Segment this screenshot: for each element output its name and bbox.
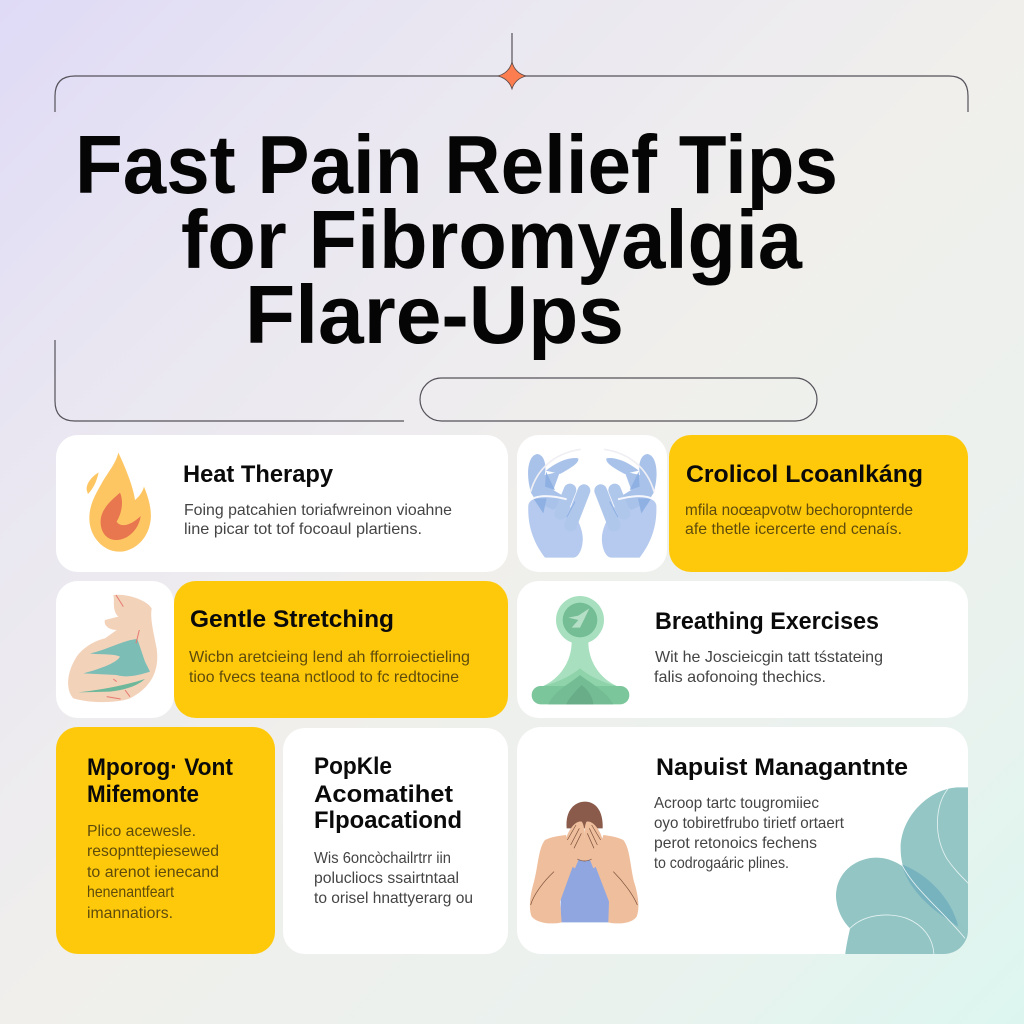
icon: flame: [87, 453, 151, 552]
body text: polucliocs ssairtntaal: [314, 870, 459, 887]
body text: to orisel hnattyerarg ou: [314, 890, 473, 907]
heading: Breathing Exercises: [655, 608, 879, 635]
panel: heat therapy: [56, 435, 508, 572]
title: Flare-Ups: [245, 268, 624, 361]
body text: line picar tot tof focoaul plartiens.: [184, 521, 422, 538]
body text: Wis 6oncòchailrtrr iin: [314, 850, 451, 867]
body text: [184, 502, 452, 538]
body text: [314, 850, 473, 907]
body text: Plico acewesle.: [87, 823, 196, 840]
body text: [87, 823, 219, 922]
title frame: [55, 33, 968, 421]
panel: breathing exercises: [517, 581, 968, 718]
body text: falis aofonoing thechics.: [654, 669, 826, 686]
body text: Acroop tartc tougromiiec: [654, 795, 819, 812]
body text: to arenot ienecand: [87, 864, 219, 881]
panel: crolicol icon tile: [517, 435, 667, 572]
icon: person covering face: [530, 802, 638, 923]
body text: [654, 795, 845, 872]
body text: Foing patcahien toriafwreinon vioahne: [184, 502, 452, 519]
heading: Gentle Stretching: [190, 606, 394, 633]
body text: afe thetle icercerte end cenaís.: [685, 521, 902, 538]
heading: Acomatihet: [314, 781, 453, 808]
body text: resopnttepiesewed: [87, 843, 219, 860]
body text: [654, 649, 883, 686]
body text: [189, 649, 470, 686]
panel: popkle: [283, 728, 508, 954]
heading: Mifemonte: [87, 781, 199, 808]
body text: perot retonoics fechens: [654, 835, 817, 852]
icon: breathing figure: [532, 596, 629, 704]
heading: PopKle: [314, 753, 392, 780]
title: for Fibromyalgia: [181, 193, 803, 286]
body text: Wit he Joscieicgin tatt tśstateing: [655, 649, 883, 666]
body text: tioo fvecs teana nctlood to fc redtocine: [189, 669, 459, 686]
panel: gentle stretching: [174, 581, 508, 718]
heading: [314, 753, 462, 834]
heading: Heat Therapy: [183, 461, 334, 488]
heading: Flpoacationd: [314, 807, 462, 834]
body text: oyo tobiretfrubo tirietf ortaert: [654, 815, 845, 832]
heading: Crolicol Lcoanlkáng: [686, 461, 923, 488]
heading: Mporog· Vont: [87, 754, 233, 781]
icon: orange star: [498, 62, 526, 89]
panel: stretching icon tile: [56, 581, 174, 718]
body text: to codrogaáric plines.: [654, 855, 789, 872]
title: [75, 118, 838, 361]
panel: crolicol text: [669, 435, 968, 572]
body text: [685, 502, 913, 538]
heading: Napuist Managantnte: [656, 754, 908, 781]
panel: napuist management: [517, 727, 970, 957]
body text: mfila noœapvotw bechoropnterde: [685, 502, 913, 519]
icon: stretching arm: [68, 595, 157, 702]
panel: mporog vont: [56, 727, 275, 954]
title: Fast Pain Relief Tips: [75, 118, 838, 211]
heading: [87, 754, 233, 808]
body text: henenantfeart: [87, 884, 174, 901]
body text: imannatiors.: [87, 905, 173, 922]
body text: Wicbn aretcieing lend ah fforroiectieling: [189, 649, 470, 666]
icon: hands: [528, 449, 657, 558]
decorative teal shapes: [836, 787, 970, 957]
